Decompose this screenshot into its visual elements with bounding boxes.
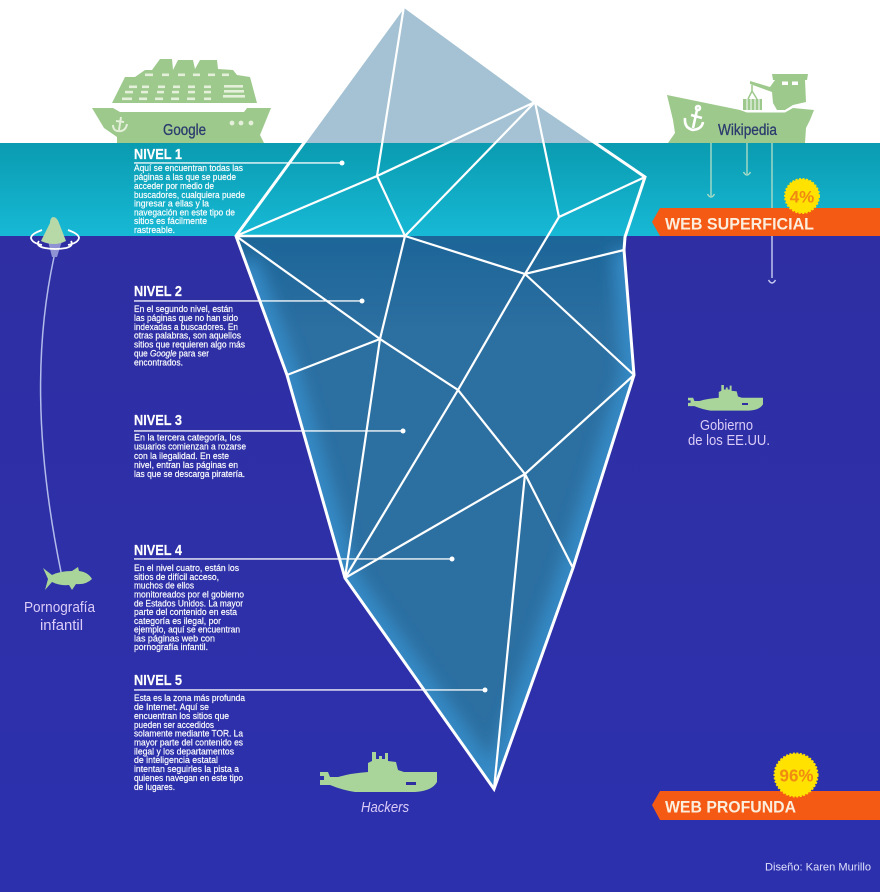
ship label: Google — [163, 122, 206, 139]
heading: NIVEL 2 — [134, 283, 182, 300]
text block: Esta es la zona más profunda — [134, 692, 246, 703]
panel: nivel 2 — [134, 283, 364, 368]
label: Pornografía infantil: Pornografía — [24, 599, 96, 616]
text block: En el segundo nivel, están — [134, 303, 233, 314]
text block: muchos de ellos — [134, 580, 194, 590]
text block — [134, 432, 246, 479]
text block: intentan seguirles la pista a — [134, 763, 240, 774]
icon: anchor — [113, 117, 127, 131]
text block: ejemplo, aquí se encuentran — [134, 624, 240, 634]
text block: que Google para ser — [134, 348, 209, 358]
label: Gobierno de los EE.UU.: Gobierno — [700, 417, 753, 434]
cargo container — [743, 85, 762, 110]
leader line — [134, 428, 406, 434]
sky background — [0, 0, 880, 143]
banner ribbon — [652, 791, 880, 820]
text block: En la tercera categoría, los — [134, 432, 241, 442]
text block: ingresar a ellas y la — [134, 198, 210, 208]
iceberg inner facet lines — [236, 6, 645, 789]
text block: de inteligencia estatal — [134, 754, 218, 765]
banner: web profunda — [652, 754, 880, 820]
text block: monitoreados por el gobierno — [134, 588, 244, 600]
anchor chains — [708, 142, 776, 283]
text block: encuentran los sitios que — [134, 710, 229, 721]
ship: Wikipedia — [667, 74, 814, 283]
ship hull — [92, 108, 271, 143]
icon: anchor — [685, 106, 703, 130]
text block: rastreable. — [134, 224, 175, 235]
ship superstructure — [112, 59, 257, 103]
buoy rings — [31, 230, 79, 249]
panel: nivel 3 — [134, 412, 406, 479]
buoy line — [41, 257, 61, 572]
banner text: WEB PROFUNDA — [665, 798, 796, 816]
panel: nivel 4 — [134, 542, 454, 652]
label: Gobierno de los EE.UU.: de los EE.UU. — [688, 432, 770, 449]
text block — [134, 562, 244, 652]
banner: web superficial — [652, 179, 880, 236]
text block: solamente mediante TOR. La — [134, 728, 244, 738]
text block: En el nivel cuatro, están los — [134, 562, 239, 573]
panel: nivel 5 — [134, 672, 488, 792]
ship hull — [667, 95, 814, 143]
text block — [134, 303, 245, 368]
text block: categoría es ilegal, por — [134, 615, 221, 626]
text block: navegación en este tipo de — [134, 206, 235, 218]
leader line — [134, 556, 454, 562]
text block — [134, 692, 246, 792]
ship label: Wikipedia — [718, 122, 777, 139]
text block: de lugares. — [134, 781, 175, 792]
icon: submarine Hackers — [320, 752, 437, 792]
heading: NIVEL 5 — [134, 672, 182, 689]
percentage badge 96%: 96% — [780, 766, 814, 786]
iceberg submerged body — [230, 236, 640, 796]
text block: de Internet. Aquí se — [134, 701, 209, 712]
heading: NIVEL 1 — [134, 146, 182, 163]
text block: las páginas web con — [134, 632, 215, 644]
ship bridge and crane — [750, 74, 808, 110]
text block: sitios de difícil acceso, — [134, 571, 219, 582]
leader line — [134, 688, 488, 692]
text block: páginas a las que se puede — [134, 171, 236, 182]
ship windows — [122, 74, 253, 125]
iceberg — [230, 6, 645, 796]
label: Pornografía infantil: infantil — [40, 617, 83, 634]
deep water background — [0, 236, 880, 892]
text block: indexadas a buscadores. En — [134, 321, 238, 332]
buoy cone — [41, 217, 66, 244]
leader line — [134, 298, 364, 304]
icon: fish — [43, 567, 92, 590]
text block: de Estados Unidos. La mayor — [134, 598, 243, 608]
text block: pueden ser accedidos — [134, 719, 214, 730]
credit: Diseño: Karen Murillo — [765, 862, 871, 874]
text block: sitios es fácilmente — [134, 215, 207, 226]
bridge windows — [782, 82, 798, 85]
text block: usuarios comienzan a rozarse — [134, 440, 246, 452]
panel: nivel 1 — [134, 146, 344, 235]
heading: NIVEL 3 — [134, 412, 182, 429]
buoy — [31, 217, 79, 572]
label: Hackers: Hackers — [361, 799, 409, 816]
percentage badge 96% — [774, 754, 818, 796]
text block: pornografía infantil. — [134, 641, 208, 652]
text block: acceder por medio de — [134, 180, 214, 191]
iceberg tip above water — [305, 6, 596, 143]
text block: buscadores, cualquiera puede — [134, 189, 245, 200]
buoy lower body — [48, 241, 62, 257]
text block: otras palabras, son aquellos — [134, 330, 241, 340]
label: Pornografía infantil — [24, 599, 96, 634]
text block: parte del contenido en esta — [134, 606, 238, 617]
text block: quienes navegan en este tipo — [134, 772, 243, 783]
text block: encontrados. — [134, 356, 183, 368]
text block — [134, 162, 245, 235]
percentage badge 4%: 4% — [790, 188, 814, 206]
shallow water band — [0, 143, 880, 236]
text block: Aquí se encuentran todas las — [134, 162, 243, 173]
text block: mayor parte del contenido es — [134, 736, 243, 748]
iceberg waterline — [236, 235, 405, 237]
text block: con la ilegalidad. En este — [134, 450, 229, 461]
iceberg outline — [236, 6, 645, 789]
percentage badge 4% — [785, 179, 819, 213]
icon: submarine Gobierno — [688, 385, 763, 411]
leader line — [134, 160, 344, 166]
text block: las páginas que no han sido — [134, 312, 238, 323]
text block: nivel, entran las páginas en — [134, 459, 238, 470]
banner ribbon — [652, 208, 880, 236]
text block: las que se descarga piratería. — [134, 468, 245, 479]
label: Gobierno de los EE.UU. — [688, 417, 770, 449]
text block: sitios que requieren algo más — [134, 338, 245, 350]
banner text: WEB SUPERFICIAL — [665, 214, 814, 234]
text block: ilegal y los departamentos — [134, 746, 234, 756]
ship: Google — [92, 59, 271, 143]
heading: NIVEL 4 — [134, 542, 183, 559]
